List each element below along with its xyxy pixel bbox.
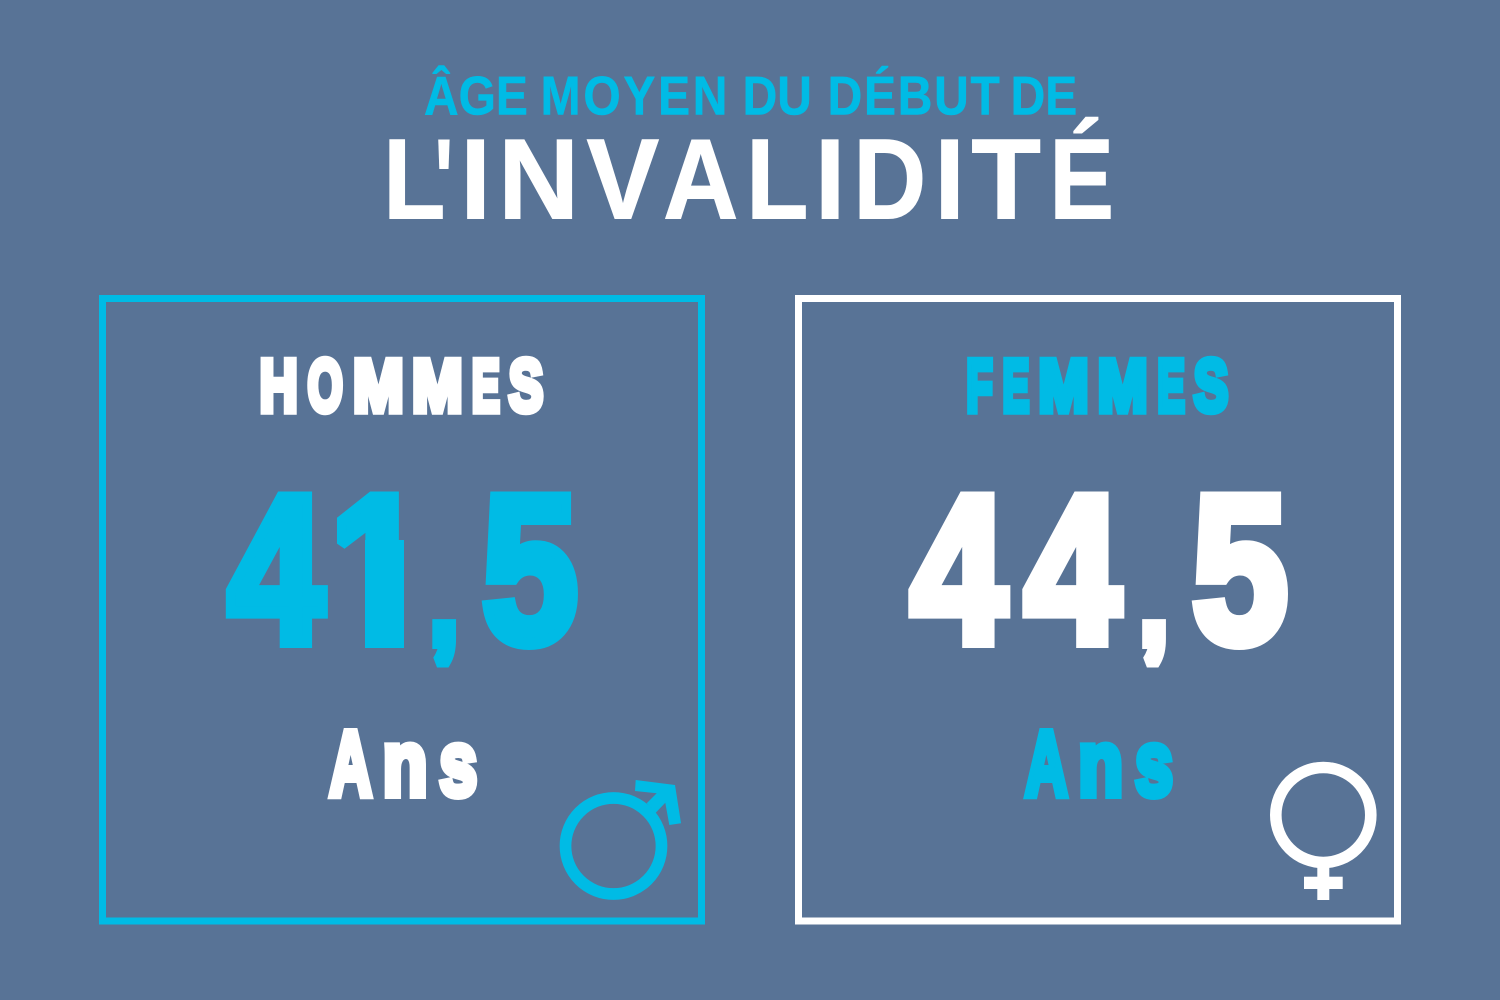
heading: femmes: M bbox=[1039, 346, 1088, 427]
unit: ans: n bbox=[383, 713, 427, 815]
title line 2: N bbox=[498, 116, 579, 244]
title line 1: MOYEN bbox=[541, 66, 746, 126]
title line 2: L bbox=[746, 116, 808, 244]
panel: hommes bbox=[102, 298, 702, 921]
title line 2: I bbox=[815, 116, 845, 244]
value: 41,5: 41 bbox=[228, 452, 426, 687]
heading: femmes: E bbox=[1003, 346, 1029, 427]
heading: hommes: E bbox=[472, 346, 500, 427]
title line 1: DÉBUT bbox=[828, 66, 1017, 126]
title line 1: DU bbox=[743, 66, 825, 126]
title line 2: A bbox=[663, 116, 738, 244]
title line 2: É bbox=[1049, 116, 1114, 244]
unit: ans: s bbox=[1135, 713, 1173, 815]
panel: femmes bbox=[798, 298, 1398, 921]
heading: hommes: M bbox=[412, 346, 462, 427]
unit: ans: A bbox=[1025, 713, 1067, 815]
heading: hommes: M bbox=[353, 346, 403, 427]
value: 44,5: 44 bbox=[911, 452, 1120, 687]
heading: femmes: F bbox=[966, 346, 992, 427]
title line 1: ÂGE bbox=[424, 65, 541, 126]
icon: male symbol bbox=[566, 780, 681, 894]
title line 2: I bbox=[460, 116, 491, 244]
title line 2: D bbox=[853, 116, 926, 244]
title line 1: DE bbox=[1011, 66, 1077, 126]
heading: femmes: E bbox=[1158, 346, 1185, 427]
unit: ans: s bbox=[440, 713, 477, 815]
value: 44,5: , bbox=[1140, 536, 1168, 669]
value: 41,5: 5 bbox=[482, 452, 578, 687]
heading: hommes: S bbox=[509, 346, 543, 427]
heading: hommes: O bbox=[308, 346, 343, 427]
unit: ans: n bbox=[1078, 713, 1123, 815]
title line 2: V bbox=[586, 116, 659, 244]
title bbox=[383, 65, 1114, 244]
value: 41,5: , bbox=[430, 536, 458, 669]
icon: female symbol bbox=[1276, 768, 1371, 900]
title line 2: T bbox=[971, 116, 1041, 244]
heading: femmes: M bbox=[1098, 346, 1147, 427]
title line 2: ' bbox=[434, 116, 453, 244]
title line 2: L bbox=[383, 116, 446, 244]
unit: ans: A bbox=[330, 713, 372, 815]
value: 41,5 bbox=[228, 452, 578, 687]
heading: hommes: H bbox=[260, 346, 298, 427]
value: 44,5: 5 bbox=[1192, 452, 1288, 687]
heading: femmes: S bbox=[1194, 346, 1228, 427]
title line 2: I bbox=[934, 116, 965, 244]
